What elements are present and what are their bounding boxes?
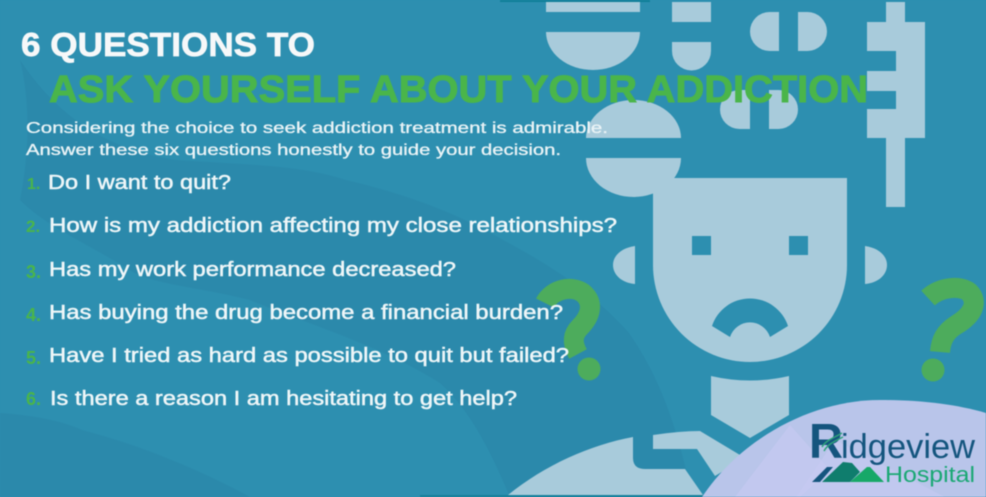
head with sad face xyxy=(653,178,847,362)
neck xyxy=(711,376,789,438)
intro text: Considering the choice to seek addiction treatment is admirable. xyxy=(26,120,608,137)
question 3: 3. xyxy=(26,262,41,282)
question 4: Has buying the drug become a financial burden? xyxy=(49,302,563,324)
icon: horizontal capsule lower xyxy=(720,90,798,129)
left ear xyxy=(613,246,635,284)
logo: Ridgeview Hospital: R xyxy=(809,415,843,469)
title line one: 6 QUESTIONS TO xyxy=(21,26,315,63)
question 4: 4. xyxy=(26,305,41,325)
right question mark xyxy=(922,288,974,382)
right ear xyxy=(865,246,887,284)
logo: Ridgeview Hospital: idgeview xyxy=(841,428,975,466)
icon: small vertical capsule xyxy=(672,2,711,70)
question 5: 5. xyxy=(26,348,41,368)
icon: syringe xyxy=(867,2,925,207)
logo: Ridgeview Hospital: Hospital xyxy=(885,462,975,487)
question list xyxy=(26,172,617,410)
question 2: 2. xyxy=(26,217,40,236)
logo badge xyxy=(702,400,986,497)
question 6: Is there a reason I am hesitating to get help? xyxy=(50,388,517,410)
question 1: 1. xyxy=(27,176,40,193)
question 5: Have I tried as hard as possible to quit but failed? xyxy=(49,345,569,367)
logo: Ridgeview Hospital xyxy=(809,415,975,487)
question 1: Do I want to quit? xyxy=(48,172,231,194)
title line two: ASK YOURSELF ABOUT YOUR ADDICTION xyxy=(49,69,868,111)
illustration: person with pills and syringe xyxy=(508,2,925,495)
intro text xyxy=(26,120,608,159)
shoulder and collar xyxy=(508,431,745,495)
intro text: Answer these six questions honestly to guide your decision. xyxy=(26,142,561,159)
icon: horizontal capsule top xyxy=(750,12,827,51)
question 6: 6. xyxy=(26,389,41,409)
icon: pill on head xyxy=(586,100,681,197)
question 3: Has my work performance decreased? xyxy=(49,259,456,281)
question 2: How is my addiction affecting my close relationships? xyxy=(49,215,617,237)
left question mark xyxy=(545,289,600,380)
icon: large pill above xyxy=(546,2,640,70)
